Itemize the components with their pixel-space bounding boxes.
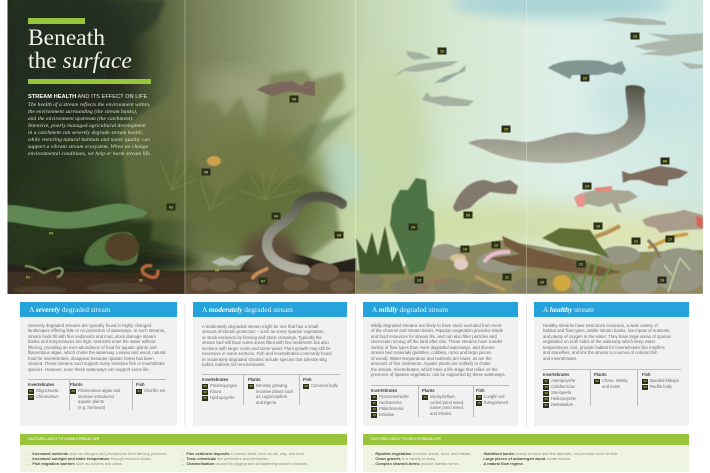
animal 01 worm bbox=[25, 266, 63, 277]
fish 24 right edge bbox=[642, 210, 703, 233]
invertebrates list: Aoteapsyche bbox=[551, 378, 575, 383]
invertebrates list: 19 bbox=[545, 391, 548, 395]
panel description: temperatures cool, provide habitat for invertebrates like mayflies bbox=[543, 345, 665, 350]
plants list: 08 bbox=[250, 384, 253, 388]
number tags in the illustration: 13 bbox=[417, 278, 421, 282]
panel description: or stock exclusion by fencing and stock crossings. Typically the bbox=[202, 335, 322, 340]
animal 06 crayfish bbox=[211, 255, 254, 266]
panel description: A moderately degraded stream might be one that has a small bbox=[202, 324, 318, 328]
invertebrates list: Deleatidium bbox=[551, 402, 573, 407]
panel description: of the channel and stream banks. Riparian vegetation provides shade bbox=[371, 328, 503, 333]
harm factors list two: – Toxic chemicals like pesticides and herbicides. bbox=[182, 456, 269, 460]
help factors list two: – Stabilised banks reduce erosion and fine deposits, and provide cover for fish. bbox=[479, 450, 618, 456]
fish list: 16 bbox=[478, 401, 481, 405]
invertebrates list: 07 bbox=[204, 396, 207, 400]
invertebrates list: Helicopsyche bbox=[551, 396, 576, 401]
panel description: filtering, providing an over-abundance of food for aquatic plants and bbox=[28, 345, 157, 350]
number tags in the illustration: 17 bbox=[668, 237, 672, 241]
fish 23 banded kokopu bbox=[548, 60, 626, 79]
plants list: and moss bbox=[602, 384, 620, 389]
illustration: stream cross-section from degraded to healthy bbox=[8, 0, 703, 294]
panel description: and plenty of oxygen in the water. They have large areas of riparian bbox=[543, 334, 671, 339]
panel description: of wood). Water temperature and nutrients are lower, as are the bbox=[371, 356, 492, 361]
fish list: Longfin eel bbox=[484, 394, 504, 399]
invertebrates list: Invertebrates bbox=[202, 377, 228, 382]
subheading: STREAM HEALTH AND ITS EFFECT ON LIFE bbox=[28, 94, 147, 100]
panel description: filamentous algae, which choke the waterway. Leaves and wood, natural bbox=[28, 350, 166, 355]
intro paragraph: environmental conditions, we help or harm stream life. bbox=[28, 151, 151, 157]
fish list: Īnānga/smelt bbox=[484, 400, 508, 405]
foliage silhouettes bbox=[110, 0, 355, 258]
number tags in the illustration: 04 bbox=[274, 214, 279, 218]
invertebrates list: 17 bbox=[545, 379, 548, 383]
grain texture bbox=[7, 0, 704, 294]
plants list: Plants bbox=[248, 377, 261, 382]
invertebrates list bbox=[543, 372, 576, 408]
number tags in the illustration: 01 bbox=[26, 275, 30, 279]
animal: longfin eel 15 bbox=[468, 85, 645, 163]
fish list: 23 bbox=[644, 379, 647, 383]
panel description: food for invertebrates, disappear because riparian forest has been bbox=[28, 356, 154, 361]
plants list: 14 bbox=[424, 395, 427, 399]
harm factors body bbox=[20, 445, 347, 472]
help factors list two: – Large pieces of submerged wood create habitat. bbox=[479, 456, 571, 460]
number tags in the illustration: 16 bbox=[633, 34, 637, 38]
invertebrates list bbox=[202, 377, 237, 401]
fish list: Redfin bully bbox=[650, 384, 672, 389]
number tags in the illustration: 05 bbox=[204, 170, 208, 174]
number tags in the illustration bbox=[26, 32, 674, 286]
intro paragraph bbox=[28, 102, 151, 157]
invertebrates list: 10 bbox=[373, 395, 376, 399]
panel: mildly degraded stream bbox=[363, 302, 518, 426]
invertebrates list: Invertebrates bbox=[543, 372, 569, 377]
help factors header: FACTORS LIKELY TO HELP STREAM LIFE bbox=[371, 437, 441, 441]
invertebrates list: Potamopyrgus bbox=[210, 383, 237, 388]
panel description bbox=[202, 324, 332, 367]
panel: healthy stream bbox=[534, 302, 689, 426]
number tags in the illustration: 19 bbox=[660, 278, 664, 282]
green aquatic plant bbox=[570, 255, 612, 292]
panel description: amount of stream protection – such as some riparian vegetation, bbox=[202, 329, 325, 334]
invertebrates list: 06 bbox=[204, 390, 207, 394]
panel description: the stream. Invertebrates, which have a life stage that relies on the bbox=[371, 367, 498, 372]
plants list: as Lagarosiphon bbox=[256, 394, 287, 399]
title: the surface bbox=[28, 48, 132, 74]
harm factors list two: – Fine sediment deposits in stream beds, such as silt, clay, and mud. bbox=[182, 450, 305, 456]
intro paragraph: while restoring natural habitats and water quality can bbox=[28, 137, 150, 143]
fish list: 09 bbox=[305, 384, 308, 388]
panel description: variety of flow types than more degraded waterways, and diverse bbox=[371, 345, 495, 350]
panel description bbox=[543, 322, 671, 361]
feathery plant fronds bbox=[160, 155, 300, 210]
page fold lines bbox=[185, 0, 526, 294]
number tags in the illustration: 06 bbox=[215, 268, 219, 272]
clump of algae on rock bbox=[105, 233, 139, 261]
panel description: Mildly degraded streams are likely to have stock excluded from most bbox=[371, 322, 501, 328]
plants list bbox=[70, 382, 120, 410]
ground: healthy stream rocks, grasses and wood bbox=[356, 178, 710, 295]
fallen wood bbox=[488, 236, 622, 276]
panel description: and invertebrates. bbox=[543, 356, 577, 361]
fish list: Banded kōkopu bbox=[650, 378, 679, 383]
number tags in the illustration: 09 bbox=[292, 97, 296, 101]
help factors body bbox=[363, 445, 689, 472]
plants list: and Elodea bbox=[430, 411, 451, 416]
invertebrates list: Hydropsyche bbox=[210, 395, 234, 400]
invertebrates list: Pycnocentrodes bbox=[379, 394, 409, 399]
number tags in the illustration: 08 bbox=[337, 233, 341, 237]
number tags in the illustration: 21 bbox=[634, 239, 638, 243]
fish list bbox=[476, 388, 508, 406]
number tags in the illustration: 04 bbox=[49, 231, 54, 235]
harm factors list two bbox=[182, 450, 308, 466]
panel description: cleared. These streams can't support many sensitive fish or invertebrate bbox=[28, 361, 165, 366]
fish list: Fish bbox=[136, 382, 145, 387]
invertebrates list: 12 bbox=[373, 407, 376, 411]
fish 09 right bbox=[622, 166, 688, 186]
fish list: 15 bbox=[478, 395, 481, 399]
invertebrates list: 18 bbox=[545, 385, 548, 389]
fish list: Common bully bbox=[311, 383, 338, 388]
fish list: Fish bbox=[303, 377, 312, 382]
panel description: landscapes offering little or no protection of waterways. In such streams, bbox=[28, 328, 165, 333]
number tags in the illustration: 09 bbox=[466, 213, 470, 217]
animal: left shortfin eel bbox=[7, 204, 148, 229]
help factors list one: – Riparian vegetation provides shade, food, and habitat. bbox=[371, 450, 471, 456]
fish list: 04 bbox=[138, 389, 141, 393]
harm factors list one: – Increased sunlight and water temperature through reduced shade. bbox=[28, 456, 152, 460]
plants list: and Egeria bbox=[256, 400, 276, 405]
ground: degraded silt and cobbles bbox=[7, 231, 356, 294]
invertebrates of the healthier stream bbox=[416, 226, 688, 292]
harm factors list one: – Increased nutrients such as nitrogen and phosphorus from farming practices. bbox=[28, 450, 168, 456]
panel description: habitat and flow types, stable stream banks, low inputs of nutrients, bbox=[543, 328, 671, 333]
panel description bbox=[28, 322, 166, 372]
long green bar bbox=[28, 79, 151, 84]
fish list bbox=[303, 377, 338, 389]
plants list: native pond weed, bbox=[430, 405, 464, 410]
panel description: Severely degraded streams are typically found in highly changed bbox=[28, 322, 151, 328]
invertebrates list: Elmidae bbox=[379, 412, 394, 417]
title bbox=[28, 25, 132, 74]
fish 09 lower bbox=[453, 180, 518, 212]
panel: severely degraded stream bbox=[20, 302, 177, 426]
tall plant 14 bbox=[390, 178, 435, 275]
panel description: stream beds fill with fine sediments and mud, stock damage stream bbox=[28, 334, 156, 339]
plants list: invasive plants such bbox=[256, 389, 293, 394]
plants list: aquatic plants bbox=[78, 399, 104, 404]
panel description: banks and temperatures are high. Nutrients enter the water without bbox=[28, 339, 155, 344]
panel description: presence of riparian vegetation, can be supported by these waterways. bbox=[371, 372, 506, 377]
harm factors header: FACTORS LIKELY TO HARM STREAM LIFE bbox=[28, 437, 99, 441]
invertebrates list: 02 bbox=[30, 395, 33, 399]
number tags in the illustration: 02 bbox=[139, 278, 143, 282]
number tags in the illustration: 16 bbox=[440, 49, 444, 53]
panel: moderately degraded stream bbox=[193, 302, 347, 426]
fish list: Fish bbox=[642, 372, 651, 377]
panel heading: A severely degraded stream bbox=[29, 305, 110, 314]
intro paragraph: Intensive, poorly managed agricultural development bbox=[28, 123, 146, 129]
panel heading bbox=[193, 302, 347, 317]
help factors list one: – Clean gravels in a variety of sizes. bbox=[371, 456, 436, 460]
factors harming stream life bbox=[20, 434, 347, 472]
fish 16 group right bbox=[602, 17, 703, 69]
invertebrates list: 05 bbox=[204, 384, 207, 388]
animal 05 snail bbox=[207, 156, 221, 166]
number tags in the illustration: 09 bbox=[663, 159, 667, 163]
invertebrates list: Stenoperla bbox=[551, 390, 571, 395]
panel description: and food resources for stream life, and can also filter particles and bbox=[371, 334, 497, 339]
animal 07 larva bbox=[252, 268, 268, 279]
plants list: Chara, Nitella, bbox=[602, 378, 629, 383]
invertebrates list: Coloburiscus bbox=[551, 384, 575, 389]
number tags in the illustration: 22 bbox=[579, 262, 583, 266]
plants list: curled pond weed, bbox=[430, 400, 464, 405]
invertebrates list bbox=[371, 388, 409, 418]
intro paragraph: support a vibrant stream ecosystem. When we change bbox=[28, 144, 148, 150]
panel description bbox=[371, 322, 506, 377]
number tags in the illustration: 11 bbox=[505, 275, 509, 279]
panel heading: A mildly degraded stream bbox=[372, 305, 448, 314]
number tags in the illustration: 03 bbox=[169, 205, 173, 209]
animal: fish in mud bbox=[84, 232, 138, 266]
water background bbox=[0, 0, 710, 294]
harm factors list one: – Fish migration barriers such as culverts and dams. bbox=[28, 460, 123, 466]
fish 16 group left bbox=[394, 51, 474, 106]
panel description: in moderately degraded streams include species that tolerate silty, bbox=[202, 357, 328, 362]
panel description: species. However, even these waterways can support some life. bbox=[28, 367, 150, 372]
plants list: Plants bbox=[422, 388, 435, 393]
intro paragraph: the environment surrounding (the stream banks), bbox=[28, 109, 137, 115]
help factors list one bbox=[371, 450, 471, 466]
invertebrates list: Ptilochorema bbox=[379, 406, 403, 411]
fish list: Fish bbox=[476, 388, 485, 393]
number tags in the illustration: 14 bbox=[411, 225, 416, 229]
number tags in the illustration: 10 bbox=[463, 247, 467, 251]
animal: grey eel 04 bbox=[267, 197, 342, 270]
factors helping stream life bbox=[363, 434, 689, 472]
moss mound bbox=[542, 228, 610, 258]
panel description: stream bed will have some areas filled with fine sediments but also bbox=[202, 340, 329, 345]
invertebrates list: 13 bbox=[373, 413, 376, 417]
number tags in the illustration: 07 bbox=[261, 279, 265, 283]
animal 02 worm bbox=[142, 266, 158, 277]
harm factors header bbox=[20, 434, 347, 445]
number tags in the illustration: 20 bbox=[540, 280, 544, 284]
fish list bbox=[136, 382, 165, 394]
intro block bbox=[28, 18, 151, 157]
plants list: invasive introduced bbox=[78, 394, 114, 399]
plants list: 22 bbox=[596, 379, 599, 383]
invertebrates list: Oligochaeta bbox=[36, 388, 58, 393]
help factors list two bbox=[479, 450, 618, 466]
plants list bbox=[594, 372, 629, 389]
invertebrates list: 20 bbox=[545, 397, 548, 401]
panel description: sections with larger rocks and some wood. Plant growth may still be bbox=[202, 346, 331, 351]
invertebrates list: Hudsonema bbox=[379, 400, 402, 405]
number tags in the illustration: 24 bbox=[585, 184, 590, 188]
short green bar bbox=[28, 18, 85, 24]
fish list: 24 bbox=[644, 385, 647, 389]
plants list: Plants bbox=[594, 372, 607, 377]
intro paragraph: in a catchment can severely degrade stream health, bbox=[28, 130, 143, 136]
panel heading bbox=[363, 302, 518, 317]
number tags in the illustration: 15 bbox=[504, 127, 508, 131]
number tags in the illustration: 18 bbox=[596, 224, 600, 228]
invertebrates list: Chironomus bbox=[36, 394, 59, 399]
plants list: Filamentous algae and bbox=[78, 388, 120, 393]
plants list bbox=[422, 388, 464, 416]
grass clump bbox=[356, 226, 405, 274]
panel heading: A moderately degraded stream bbox=[202, 305, 293, 314]
help factors header bbox=[363, 434, 689, 445]
harm factors list two: – Channelisation caused by digging and straightening stream channels. bbox=[182, 460, 308, 466]
number tags in the illustration: 12 bbox=[494, 243, 498, 247]
help factors list one: – Complex channel-forms provide habitat niches. bbox=[371, 460, 460, 466]
intro paragraph: and the environment upstream (the catchment). bbox=[28, 116, 134, 122]
plants list: (e.g. hornwort) bbox=[78, 405, 105, 410]
fish list: Shortfin eel bbox=[144, 388, 165, 393]
plants list: Densely growing bbox=[256, 383, 287, 388]
plants list bbox=[248, 377, 294, 405]
panel description: chemicals running off the land after rain. These streams have a wider bbox=[371, 339, 502, 344]
fish 24 redfin bully bbox=[574, 186, 638, 213]
panel description: vegetation on both sides of the waterway which keep water bbox=[543, 339, 655, 344]
panel description: amounts of fine sediments. Aquatic plants are unlikely to choke bbox=[371, 361, 491, 366]
number tags in the illustration: 23 bbox=[583, 76, 587, 80]
fish list bbox=[642, 372, 679, 390]
panel description: stream bed materials (pebbles, cobbles, rocks and large pieces bbox=[371, 350, 491, 355]
panel description: Healthy streams have total stock exclusion, a wide variety of bbox=[543, 322, 658, 328]
panel heading: A healthy stream bbox=[543, 305, 594, 314]
invertebrates list bbox=[28, 382, 59, 400]
plants list: 03 bbox=[72, 389, 75, 393]
invertebrates list: 01 bbox=[30, 389, 33, 393]
invertebrates list: 11 bbox=[373, 401, 376, 405]
fish 09 upper bbox=[257, 81, 315, 96]
plants list: Myriophyllum, bbox=[430, 394, 456, 399]
panel heading bbox=[20, 302, 177, 317]
panel description: excessive in some sections. Fish and invertebrates commonly found bbox=[202, 351, 332, 356]
invertebrates list: Kōura bbox=[210, 389, 221, 394]
title: Beneath bbox=[28, 25, 105, 51]
help factors list two: – A natural flow regime. bbox=[479, 460, 524, 466]
invertebrates list: 21 bbox=[545, 403, 548, 407]
plants list: Plants bbox=[70, 382, 83, 387]
harm factors list one bbox=[28, 450, 168, 466]
panel heading bbox=[534, 302, 689, 317]
invertebrates list: Invertebrates bbox=[371, 388, 397, 393]
panel description: and stoneflies, and link the stream to sources of colonist fish bbox=[543, 350, 658, 355]
invertebrates list: Invertebrates bbox=[28, 382, 54, 387]
panel description: turbid, nutrient rich environments. bbox=[202, 362, 266, 367]
intro paragraph: The health of a stream reflects the environment within, bbox=[28, 102, 151, 108]
